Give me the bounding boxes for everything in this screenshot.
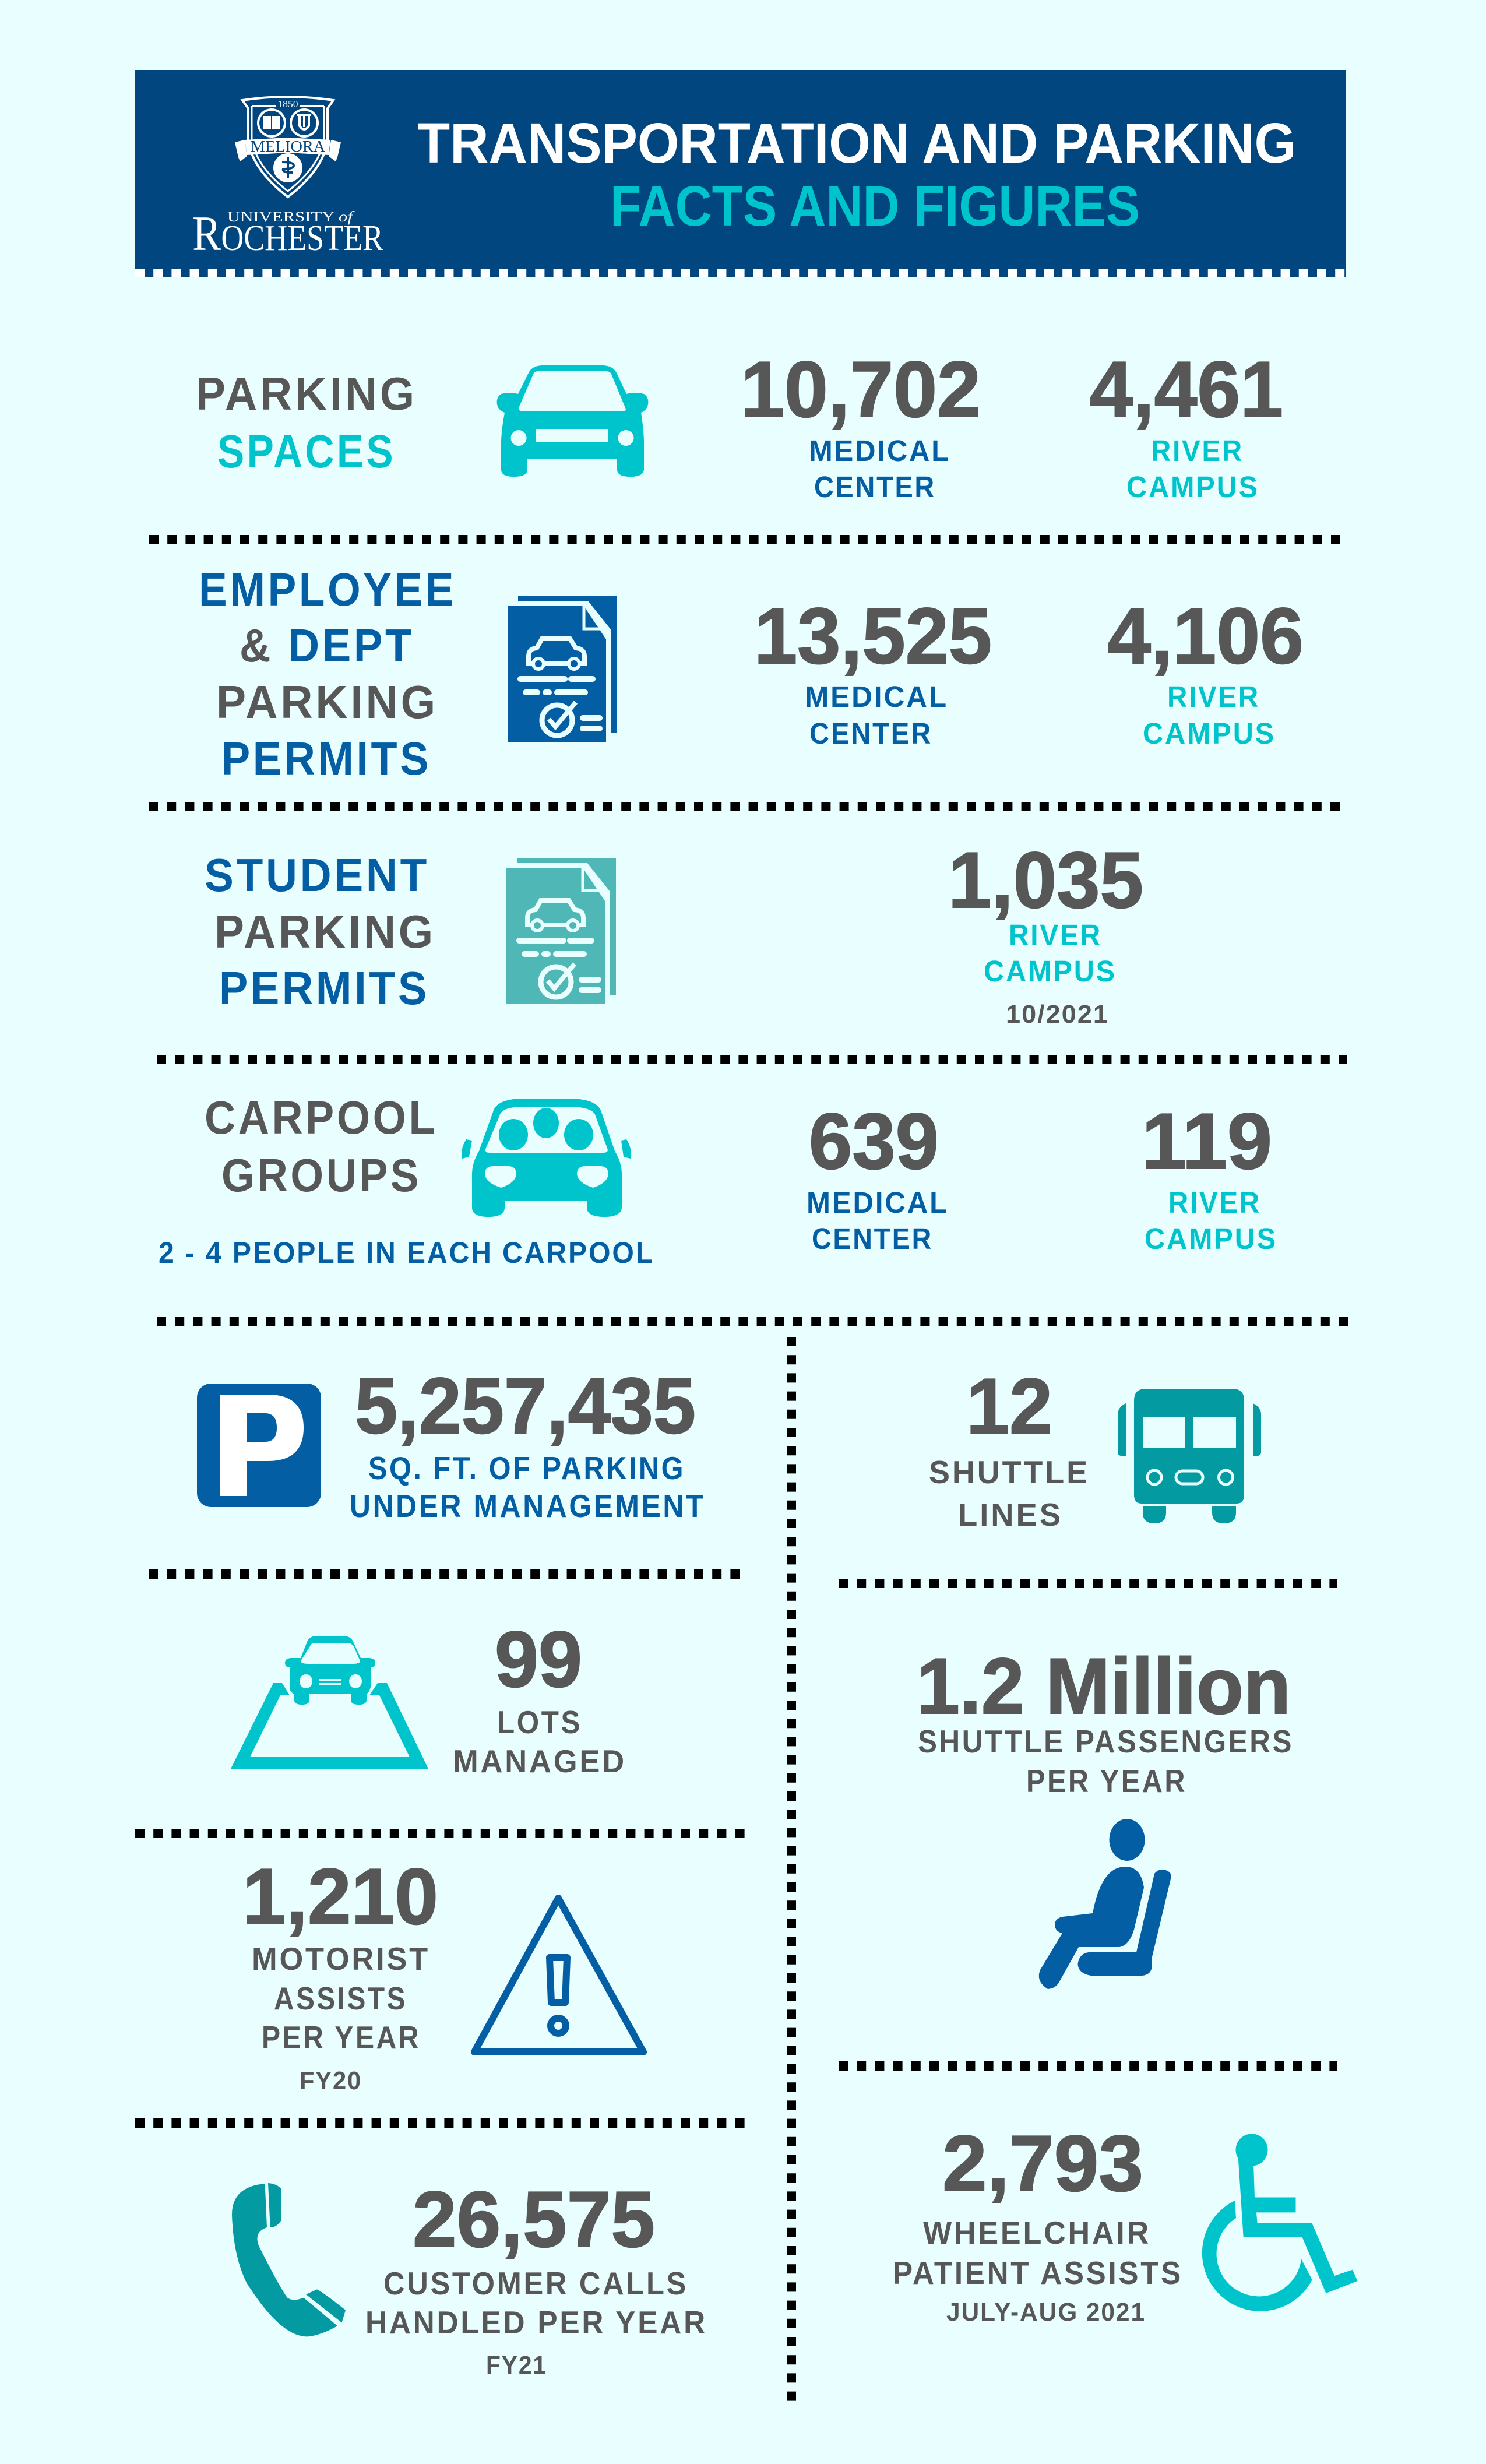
stat: [917, 1642, 1294, 1799]
panel: motorist assists: [242, 1852, 643, 2095]
stat: 1.2 Million: [917, 1642, 1291, 1730]
stat: medical center: 639: [809, 1097, 939, 1185]
panel: wheelchair assists: [893, 2119, 1358, 2326]
stat: river campus: CAMPUS: [1126, 470, 1259, 504]
stat: 2,793: [942, 2119, 1143, 2208]
heading: & DEPT: [240, 619, 414, 671]
icon: permit document: [508, 596, 617, 742]
heading: CARPOOL: [205, 1092, 438, 1143]
icon: student permit document: [506, 858, 616, 1004]
stat: medical center: CENTER: [814, 470, 936, 504]
stat: river campus: 1,035: [948, 836, 1143, 924]
icon: warning triangle: [474, 1898, 643, 2052]
heading: GROUPS: [221, 1149, 421, 1201]
heading: [205, 849, 436, 1014]
panel: employee and dept parking permits: [199, 564, 1304, 784]
title: TRANSPORTATION AND PARKING: [417, 111, 1296, 175]
stat: MOTORIST: [252, 1941, 430, 1977]
icon: crest shield: 1850: [277, 98, 298, 110]
stat: WHEELCHAIR: [923, 2215, 1151, 2251]
stat: [929, 1362, 1090, 1533]
logo: University of Rochester: UNIVERSITY of: [227, 209, 355, 225]
panel: customer calls: [232, 2175, 707, 2379]
stat: medical center: MEDICAL: [809, 434, 950, 467]
logo: University of Rochester: [192, 97, 384, 261]
icon: seated passenger: [1039, 1819, 1171, 1989]
stat: river campus: RIVER: [1151, 434, 1244, 467]
stat: 12: [966, 1362, 1052, 1451]
stat: JULY-AUG 2021: [946, 2298, 1146, 2326]
stat: 5,257,435: [355, 1361, 696, 1450]
stat: PER YEAR: [262, 2019, 421, 2055]
stat: MANAGED: [453, 1743, 626, 1779]
stat: river campus: 10/2021: [1006, 1000, 1109, 1029]
stat: CUSTOMER CALLS: [383, 2265, 688, 2301]
stat: medical center: CENTER: [812, 1222, 933, 1255]
stat: PER YEAR: [1026, 1763, 1187, 1799]
icon: telephone handset: [232, 2183, 346, 2336]
stat: [453, 1615, 626, 1779]
stat: river campus: [1142, 1097, 1277, 1255]
stat: river campus: RIVER: [1168, 1186, 1261, 1219]
stat: medical center: [807, 1097, 949, 1255]
panel: header banner: [135, 70, 1346, 277]
stat: SHUTTLE PASSENGERS: [918, 1723, 1294, 1759]
stat: HANDLED PER YEAR: [365, 2304, 707, 2340]
title: [417, 111, 1296, 238]
heading: [199, 564, 456, 784]
stat: [350, 1361, 706, 1524]
panel: parking spaces: [196, 345, 1283, 504]
heading: STUDENT: [205, 849, 429, 901]
heading: EMPLOYEE: [199, 564, 456, 615]
panel: shuttle passengers: [917, 1642, 1294, 1989]
stat: 1,210: [242, 1852, 438, 1941]
icon: carpool car: [462, 1099, 631, 1217]
icon: crest shield: [235, 97, 341, 197]
stat: SQ. FT. OF PARKING: [368, 1450, 685, 1486]
stat: medical center: [741, 345, 981, 504]
icon: wheelchair: [1202, 2134, 1358, 2311]
heading: [196, 368, 417, 477]
panel: lots managed: [231, 1615, 626, 1779]
heading: PARKING: [196, 368, 417, 420]
stat: medical center: CENTER: [809, 717, 932, 750]
heading: PARKING: [216, 676, 438, 728]
stat: river campus: CAMPUS: [984, 955, 1117, 988]
stat: medical center: 13,525: [754, 592, 992, 680]
stat: river campus: [1090, 345, 1283, 504]
heading: [205, 1092, 438, 1201]
stat: medical center: 10,702: [741, 345, 981, 434]
heading: SPACES: [217, 425, 396, 477]
stat: [365, 2175, 707, 2379]
logo: University of Rochester: ROCHESTER: [192, 206, 384, 261]
stat: river campus: RIVER: [1009, 918, 1102, 952]
stat: FY21: [486, 2351, 547, 2379]
title: FACTS AND FIGURES: [610, 174, 1140, 238]
stat: 99: [495, 1615, 582, 1703]
stat: SHUTTLE: [929, 1454, 1090, 1490]
stat: river campus: CAMPUS: [1145, 1222, 1277, 1255]
panel: shuttle lines: [929, 1362, 1261, 1533]
stat: 26,575: [413, 2175, 655, 2264]
stat: river campus: 4,106: [1107, 592, 1304, 680]
panel: carpool groups: [159, 1092, 1277, 1269]
icon: crest shield: MELIORA: [251, 138, 326, 155]
stat: river campus: RIVER: [1167, 680, 1260, 713]
stat: river campus: 4,461: [1090, 345, 1283, 434]
stat: medical center: MEDICAL: [807, 1186, 949, 1219]
stat: PATIENT ASSISTS: [893, 2255, 1183, 2291]
heading: PERMITS: [219, 962, 429, 1014]
stat: LINES: [958, 1497, 1063, 1533]
icon: parking sign: [197, 1384, 321, 1507]
stat: river campus: 119: [1142, 1097, 1272, 1185]
stat: UNDER MANAGEMENT: [350, 1488, 706, 1524]
stat: [893, 2119, 1183, 2326]
stat: medical center: [754, 592, 992, 750]
heading: PARKING: [214, 906, 436, 958]
icon: car front: [497, 365, 648, 477]
panel: student parking permits: [205, 836, 1143, 1029]
stat: river campus: [1107, 592, 1304, 750]
panel: square feet of parking: [197, 1361, 706, 1524]
stat: LOTS: [497, 1704, 582, 1740]
caption: 2 - 4 PEOPLE IN EACH CARPOOL: [159, 1236, 654, 1269]
stat: river campus: CAMPUS: [1143, 717, 1276, 750]
stat: ASSISTS: [274, 1980, 407, 2016]
stat: FY20: [300, 2067, 362, 2095]
heading: PERMITS: [221, 733, 431, 784]
icon: car in parking lot: [231, 1636, 428, 1769]
stat: medical center: MEDICAL: [805, 680, 948, 713]
stat: [242, 1852, 438, 2095]
icon: bus: [1118, 1389, 1261, 1523]
stat: river campus: [948, 836, 1143, 1029]
